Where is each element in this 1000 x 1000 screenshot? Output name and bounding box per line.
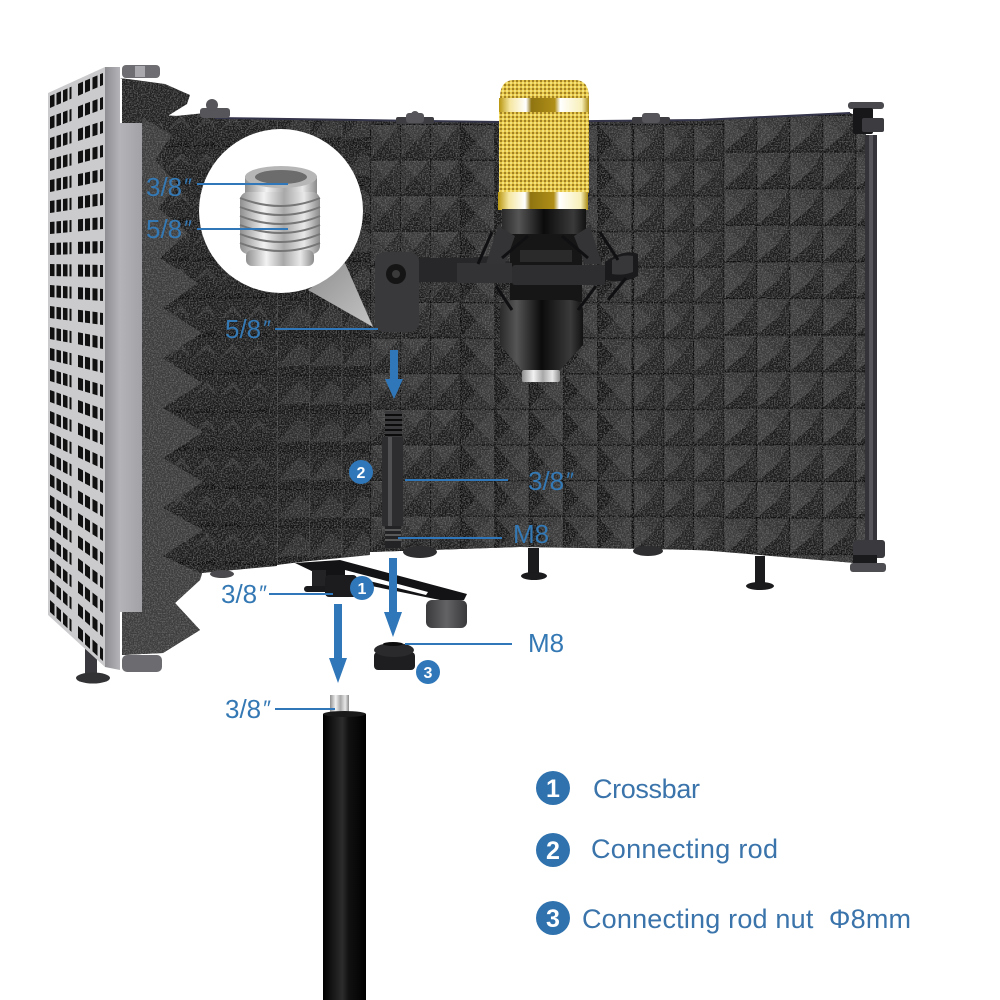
mic clip xyxy=(364,246,419,332)
callout: 5/8 on adapter: 5/8 xyxy=(146,214,182,244)
microphone gold head xyxy=(498,80,589,210)
microphone xyxy=(364,80,638,382)
bottom feet and screws xyxy=(210,546,774,590)
callout: 5/8 on clip: ″ xyxy=(262,316,271,341)
badge 3 on nut xyxy=(416,660,440,684)
legend item 2: connecting rod: Connecting rod xyxy=(591,834,778,864)
callout: M8 on nut: M8 xyxy=(528,628,564,658)
microphone body xyxy=(500,209,586,382)
bottom-left hinge bolt xyxy=(122,655,162,672)
badge 2 on rod xyxy=(349,460,373,484)
shock mount xyxy=(418,226,638,310)
callout: 3/8 on stud xyxy=(225,694,335,724)
badge 3 on nut: 3 xyxy=(424,665,433,682)
callout: 3/8 on rod: ″ xyxy=(565,468,574,493)
legend xyxy=(536,771,911,935)
legend item 1: crossbar xyxy=(536,771,700,805)
right metal frame and clamps xyxy=(848,102,886,572)
legend item 1: crossbar: Crossbar xyxy=(593,774,700,804)
stand pole with stud xyxy=(323,695,366,1000)
callout: 3/8 on rod: 3/8 xyxy=(528,466,564,496)
callout: 3/8 on adapter: 3/8 xyxy=(146,172,182,202)
top-left hinge bolt xyxy=(122,65,160,78)
badge 2 on rod: 2 xyxy=(357,465,366,482)
metal hinge frame of left panel xyxy=(105,67,142,670)
adapter screw illustration xyxy=(240,166,320,266)
left perforated metal panel xyxy=(48,67,105,667)
foam shield: acoustic pyramid foam xyxy=(120,78,866,655)
callout: 3/8 on crossbar: ″ xyxy=(258,581,267,606)
badge 1 on crossbar: 1 xyxy=(358,581,367,598)
legend item 2: connecting rod: 2 xyxy=(546,837,560,865)
crossbar xyxy=(295,560,467,628)
legend item 3: connecting rod nut: Connecting rod nut Φ8mm xyxy=(582,904,911,934)
magnifier circle xyxy=(199,129,363,293)
callout: 3/8 on adapter: ″ xyxy=(183,174,192,199)
left foam teeth xyxy=(122,118,203,655)
callout: 5/8 on adapter xyxy=(146,214,288,244)
connecting rod nut xyxy=(374,642,415,670)
arrow: clip to rod xyxy=(385,350,403,399)
callout: 3/8 on rod xyxy=(405,466,574,496)
callout: 3/8 on crossbar: 3/8 xyxy=(221,579,257,609)
legend item 1: crossbar: 1 xyxy=(546,775,560,803)
callout: 3/8 on stud: 3/8 xyxy=(225,694,261,724)
arrow: rod to nut xyxy=(384,558,402,637)
magnifier callout pointer xyxy=(308,263,373,327)
callout: 3/8 on stud: ″ xyxy=(262,696,271,721)
top edge of shield xyxy=(215,113,850,122)
callout: 5/8 on clip: 5/8 xyxy=(225,314,261,344)
callout: M8 on rod: M8 xyxy=(513,519,549,549)
legend item 2: connecting rod xyxy=(536,833,778,867)
callout: 3/8 on crossbar xyxy=(221,579,333,609)
top hinge bolts on foam edge xyxy=(200,99,670,124)
callout: 3/8 on adapter xyxy=(146,172,288,202)
badge 1 on crossbar xyxy=(350,576,374,600)
legend item 3: connecting rod nut: 3 xyxy=(546,905,560,933)
connecting rod xyxy=(382,411,403,548)
callout: 5/8 on clip xyxy=(225,314,378,344)
callout: 5/8 on adapter: ″ xyxy=(183,216,192,241)
left panel foot xyxy=(76,640,110,684)
arrow: crossbar to stand xyxy=(329,604,347,683)
